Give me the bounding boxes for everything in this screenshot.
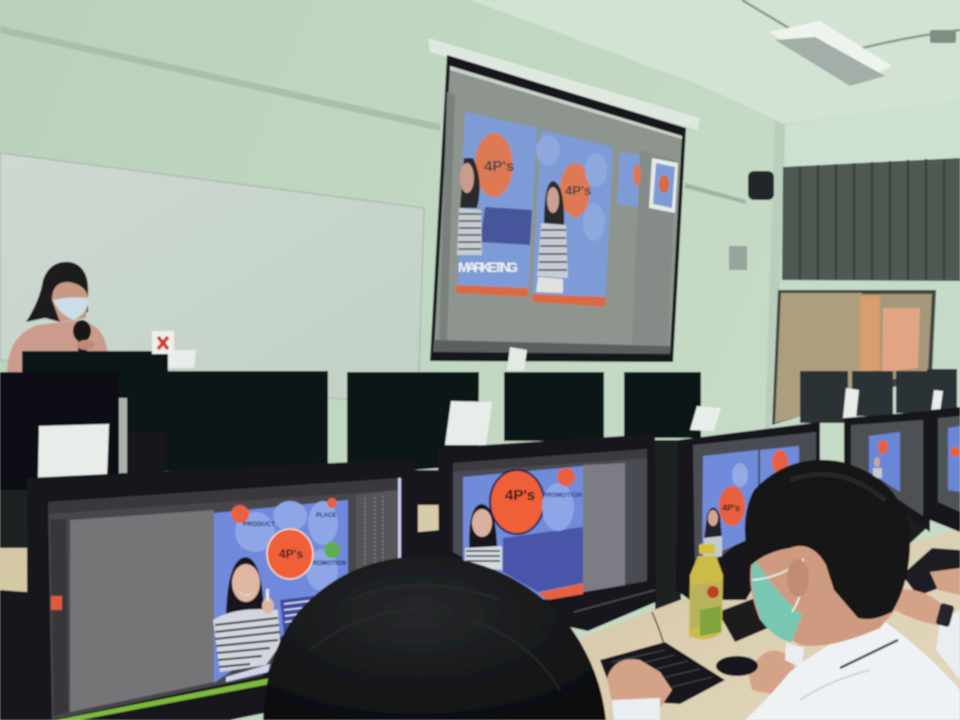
projection screen: [430, 55, 686, 362]
projected poster left: MARKETING: [458, 259, 518, 275]
middle desk strip: [418, 505, 440, 532]
ceiling light: [769, 21, 892, 86]
poster on monitor: [213, 498, 348, 683]
computer mouse: [716, 656, 758, 676]
projected poster left: [456, 112, 537, 297]
app toolbar: [453, 449, 647, 472]
poster on monitor: [463, 466, 583, 600]
drink bottle: [689, 544, 723, 639]
paper notes: [38, 350, 943, 478]
desk shadow under monitors: [730, 470, 930, 600]
left desk: [0, 548, 27, 592]
wall junction box: [930, 30, 956, 43]
projected poster right: [532, 130, 613, 307]
face and neck: [750, 520, 895, 646]
projected tool column: [439, 92, 455, 340]
hands on keyboard: [607, 568, 960, 708]
projector screen casing: [428, 38, 700, 130]
foreground student head: [263, 556, 606, 720]
dark under-desk backing: [0, 432, 442, 720]
poster on monitor: 4P's: [279, 547, 304, 561]
front left monitor: [27, 459, 415, 720]
poster on monitor: PLACE: [316, 513, 336, 519]
projected poster right: 4P's: [565, 183, 591, 198]
ceiling: [470, 0, 960, 124]
wall switch box: [729, 246, 747, 270]
poster on monitor: PROMOTION: [309, 561, 346, 567]
whiteboard: [0, 153, 424, 406]
microphone: [73, 320, 95, 352]
hair: [745, 460, 910, 619]
projected small artboard: [617, 152, 640, 207]
poster on monitor: PROMOTION: [542, 492, 582, 499]
watch: [935, 603, 955, 627]
desk cable: [652, 612, 664, 645]
right desk: [575, 528, 960, 720]
window blinds: [782, 158, 960, 281]
left monitor: [0, 372, 127, 548]
app toolbar: [48, 478, 401, 514]
light side strip: [398, 478, 401, 562]
teacher mask: [53, 297, 89, 320]
ear: [787, 559, 809, 597]
wall rail beside screen: [685, 183, 746, 204]
right monitor three: 4P's: [722, 503, 740, 513]
ceiling wires: [742, 0, 960, 50]
front keyboard: [600, 642, 725, 704]
red x sign: [152, 331, 174, 354]
speaker: [748, 171, 774, 200]
front middle monitor: [438, 434, 656, 631]
projected right panel: [632, 150, 676, 345]
gray canvas: [70, 510, 214, 712]
white shirt: [745, 618, 960, 720]
surgical mask: [752, 557, 802, 642]
tool column: [50, 519, 68, 716]
monitor chin: [574, 590, 655, 612]
teacher: [7, 262, 107, 372]
note on screen edge: [507, 347, 527, 371]
back row monitors: [22, 351, 957, 475]
right monitor five: [930, 407, 960, 532]
projected poster left: 4P's: [484, 158, 514, 175]
door: [772, 290, 936, 425]
stand shadows between rows: [655, 440, 681, 610]
poster on monitor: PRODUCT: [243, 521, 275, 528]
poster on monitor: 4P's: [505, 487, 535, 504]
layers panel: [356, 490, 397, 600]
right monitor four: [844, 411, 930, 532]
student on right: [745, 460, 960, 720]
rear keyboards: [718, 598, 775, 642]
green status bar: [56, 678, 270, 720]
right monitor three: [676, 422, 820, 600]
whiteboard rail: [0, 26, 440, 131]
projected thumbnail: [649, 158, 678, 213]
gray canvas: [583, 463, 625, 592]
left side chair: [0, 604, 27, 720]
projected taskbar: [433, 340, 671, 354]
cuffs: [612, 610, 960, 720]
